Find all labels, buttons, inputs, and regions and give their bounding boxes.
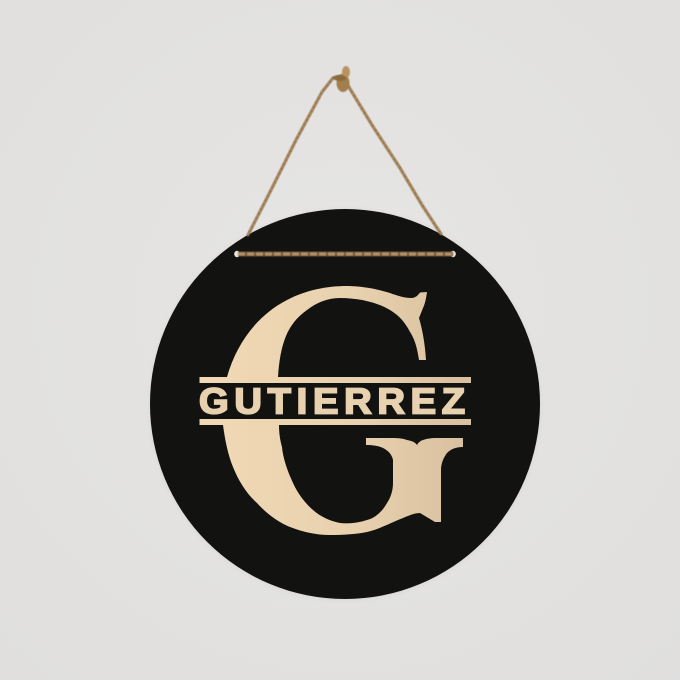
black round sign (150, 209, 540, 599)
rope knot (334, 66, 350, 92)
lower name bar (200, 419, 471, 425)
left hole (234, 251, 240, 257)
upper name bar (200, 377, 471, 383)
right hole (450, 251, 456, 257)
disc shadow (150, 210, 540, 600)
horizontal rope across sign (238, 252, 453, 256)
hanging rope (248, 75, 441, 235)
monogram letter G: upper half (227, 286, 427, 377)
monogram letter G: lower half (223, 425, 463, 535)
family name: GUTIERREZ (199, 381, 465, 421)
